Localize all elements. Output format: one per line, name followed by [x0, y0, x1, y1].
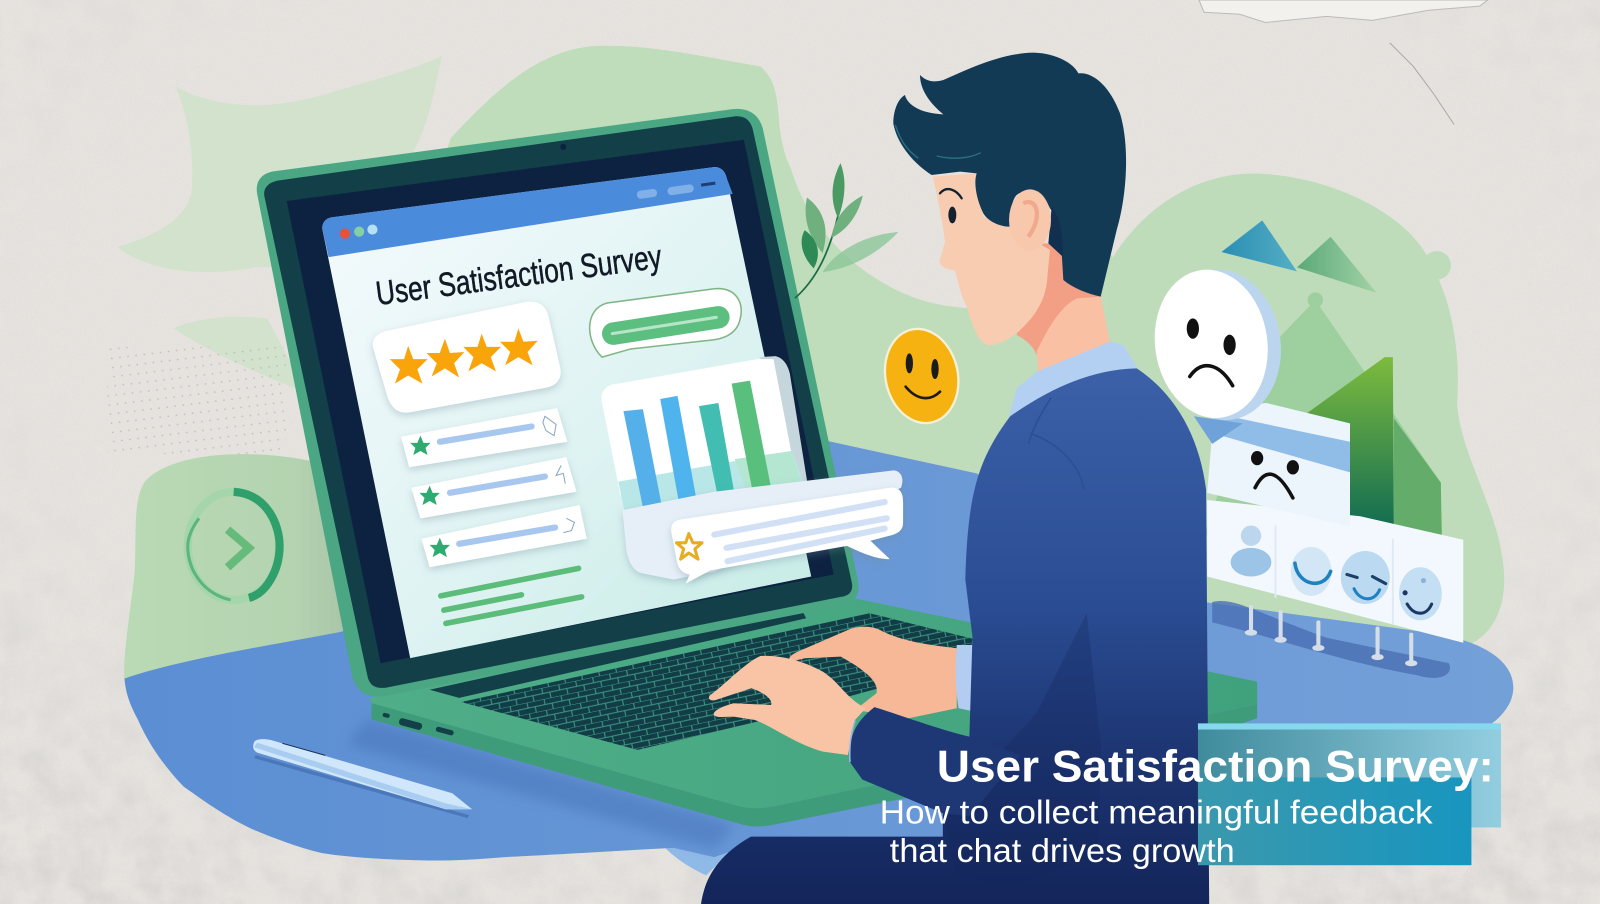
- hinge strip: [430, 608, 806, 698]
- panel feet: [1245, 630, 1417, 666]
- sad face rim: [1152, 262, 1291, 428]
- smile face 3: [1399, 567, 1442, 620]
- green text lines: [441, 568, 582, 623]
- eye: [948, 207, 956, 223]
- head: [893, 53, 1138, 418]
- survey row 1: [401, 408, 567, 467]
- upper hand: [789, 627, 957, 718]
- survey row 2: [411, 457, 577, 518]
- right green blob with mountains: [1107, 173, 1504, 645]
- sad feedback window and panel: [1145, 262, 1463, 678]
- neck: [1037, 297, 1110, 373]
- desk surface: [124, 441, 1513, 861]
- comment bubbles: [622, 470, 903, 584]
- shirt cuff: [956, 645, 975, 712]
- shirt collar: [1008, 342, 1138, 418]
- leaf sprig: [795, 163, 898, 298]
- hair shadow behind ear: [1048, 207, 1063, 257]
- person: [701, 53, 1209, 904]
- hair: [893, 53, 1126, 297]
- ear: [1009, 189, 1051, 251]
- title: User Satisfaction Survey:: [937, 741, 1494, 792]
- decorative green blobs: [117, 46, 1122, 682]
- icon: green triangle: [1297, 237, 1377, 293]
- chart card: [602, 356, 808, 525]
- subtitle line 1: How to collect meaningful feedback: [880, 794, 1433, 831]
- dotted texture: [107, 347, 286, 454]
- subtitle line 2: that chat drives growth: [890, 833, 1235, 870]
- banner front panel: [1198, 777, 1471, 865]
- star rating card: [373, 302, 561, 413]
- pen: [253, 739, 472, 817]
- keyboard: [461, 613, 972, 750]
- face: [933, 173, 1050, 345]
- laptop base front: [371, 703, 1257, 827]
- laptop shadow: [347, 719, 735, 849]
- mountain: right: [1394, 418, 1442, 535]
- mountain: pale: [1204, 300, 1441, 536]
- smile face 1: [1291, 547, 1332, 596]
- progress ring icon: [188, 492, 280, 600]
- laptop ports: [382, 712, 454, 736]
- browser title bar: [322, 167, 733, 257]
- sad face: [1145, 262, 1277, 425]
- laptop lid rim: [257, 109, 859, 697]
- eyebrow: [940, 189, 962, 198]
- sleeve: [850, 707, 1020, 816]
- screen page: [322, 167, 811, 658]
- laptop: [257, 109, 1257, 827]
- panel legs: [1251, 607, 1411, 661]
- chart bars: [623, 381, 771, 512]
- icon: smiling face: [875, 321, 968, 431]
- jacket fold shading: [944, 613, 1101, 887]
- light desk edge: [663, 828, 760, 875]
- icon: blue triangle: [1221, 220, 1297, 271]
- speech bubble with green pill: [590, 289, 741, 357]
- jacket seams: [1029, 398, 1084, 490]
- title banner: [880, 723, 1501, 870]
- screen surround: [287, 140, 834, 663]
- shadow under panel: [1212, 601, 1450, 678]
- emoji panel: [1207, 500, 1463, 643]
- icon: outline star: [677, 534, 702, 559]
- sad window header: [1214, 413, 1350, 472]
- survey row 3: [421, 505, 587, 567]
- sad window: [1207, 403, 1350, 526]
- lower hand: [709, 656, 866, 755]
- laptop bezel: [264, 116, 852, 688]
- jacket: [701, 368, 1209, 904]
- screen heading: User Satisfaction Survey: [374, 239, 664, 313]
- hands: [709, 627, 975, 755]
- mountain: green: [1286, 357, 1394, 531]
- hair highlights: [895, 125, 981, 158]
- laptop deck: [369, 598, 1257, 808]
- banner back panel: [1198, 723, 1501, 827]
- bubble tail: [1194, 416, 1243, 444]
- smile face 2: [1341, 551, 1390, 604]
- person avatar: [1231, 525, 1271, 576]
- neck shadow: [1017, 243, 1101, 355]
